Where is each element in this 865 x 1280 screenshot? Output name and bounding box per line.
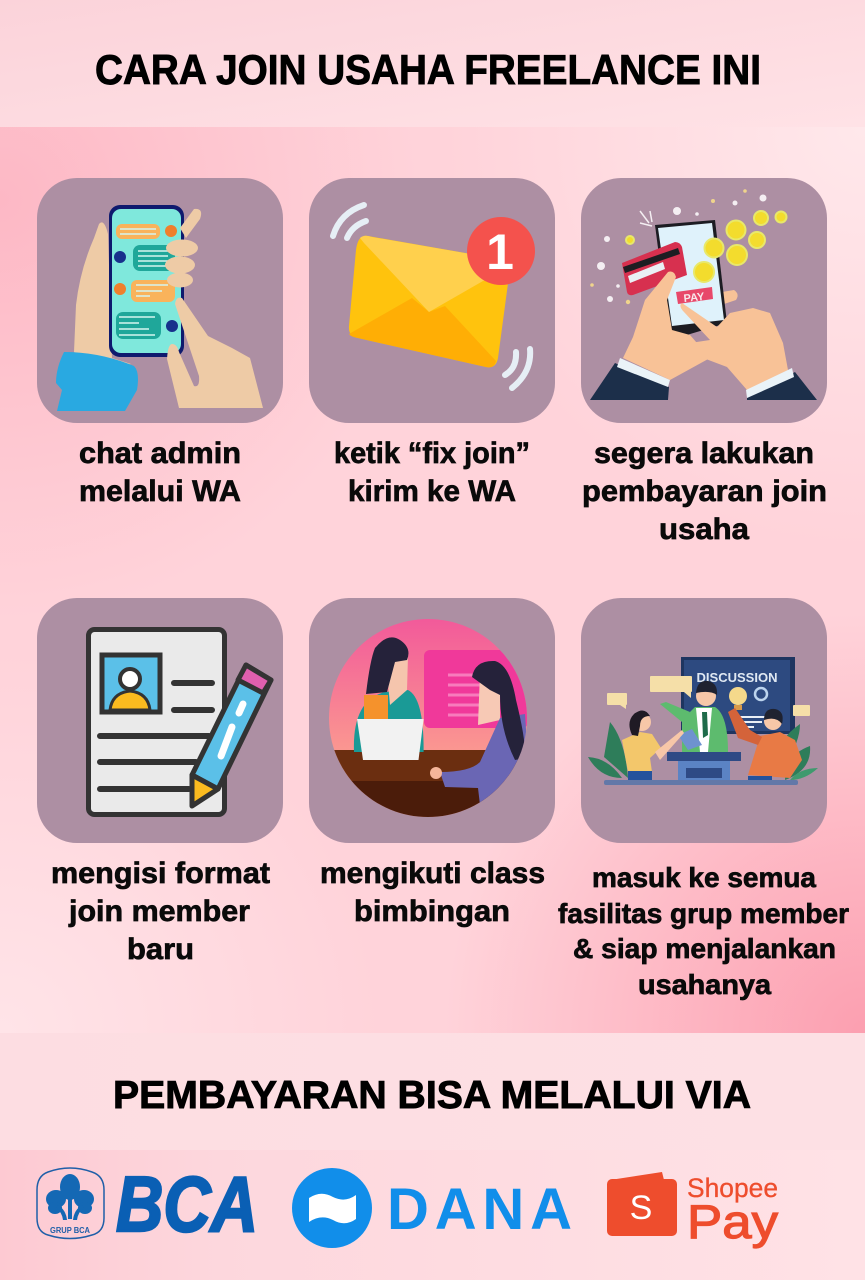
- heading: payment methods: PEMBAYARAN BISA MELALUI VIA: [113, 1074, 751, 1117]
- icon: envelope: [349, 236, 511, 367]
- label: step 5: bimbingan: [354, 895, 510, 928]
- text: DANA wordmark: DANA: [387, 1177, 572, 1242]
- icon: pay button: [676, 287, 713, 305]
- header band: [0, 0, 865, 127]
- icon: spark lines: [640, 211, 652, 226]
- logo: ShopeePay: [607, 1172, 779, 1248]
- text: Shopee Pay wordmark: Shopee: [687, 1173, 778, 1203]
- icon: floor: [604, 780, 798, 785]
- label: step 6: & siap menjalankan: [573, 933, 836, 964]
- label: step 3: pembayaran join: [582, 475, 827, 508]
- icon: left hand: [623, 272, 710, 380]
- icon: coins: [626, 211, 786, 282]
- label: step 6: usahanya: [638, 969, 772, 1000]
- icon: discussion board: DISCUSSION: [696, 671, 778, 685]
- logo: BCA: [37, 1160, 258, 1248]
- panel: step 4 form: [37, 598, 283, 843]
- label: step 3: usaha: [659, 513, 749, 546]
- label: step 2: kirim ke WA: [348, 475, 516, 508]
- icon: man right: [728, 708, 802, 780]
- icon: BCA emblem: GRUP BCA: [50, 1226, 90, 1235]
- icon: fingers: [165, 209, 201, 288]
- icon: sparkle dots: [590, 189, 766, 304]
- icon: discussion board: [681, 657, 795, 734]
- label: step 1: chat admin: [79, 437, 241, 470]
- icon: sleeves and cuffs: [590, 358, 817, 400]
- icon: payment phone: [655, 220, 727, 340]
- label: step 6: fasilitas grup member: [558, 898, 849, 929]
- panel: step 1 chat admin: [37, 178, 283, 423]
- icon: notification badge: 1: [486, 224, 514, 280]
- icon: left hand holding phone: [74, 222, 131, 372]
- icon: fingers behind phone: [722, 290, 738, 304]
- icon: pointing hand: [167, 298, 263, 408]
- label: step 2: ketik “fix join”: [334, 437, 530, 470]
- footer heading band: [0, 1033, 865, 1150]
- icon: blue sleeve: [56, 352, 138, 411]
- icon: Shopee wallet: S: [630, 1189, 652, 1227]
- icon: right hand: [680, 303, 788, 390]
- icon: speech bubbles: [607, 676, 810, 716]
- icon: DANA circle: [292, 1168, 372, 1248]
- payment logo band: [0, 1150, 865, 1280]
- icon: podium: [667, 752, 741, 780]
- label: step 6: masuk ke semua: [592, 862, 817, 893]
- label: step 4: mengisi format: [51, 857, 270, 890]
- panel: step 2 email notification: [309, 178, 555, 423]
- icon: chat phone: [109, 205, 184, 357]
- label: step 4: join member: [68, 895, 250, 928]
- text: Shopee Pay wordmark: Pay: [687, 1195, 779, 1248]
- icon: Shopee wallet: [607, 1172, 677, 1236]
- icon: presenter: [660, 681, 728, 752]
- text: Shopee Pay wordmark: [687, 1173, 779, 1248]
- label: step 5: mengikuti class: [320, 857, 545, 890]
- icon: document: [88, 630, 224, 814]
- title: CARA JOIN USAHA FREELANCE INI: [95, 46, 761, 93]
- icon: credit card: [622, 242, 687, 295]
- icon: plants: [588, 722, 818, 780]
- icon: notification badge: [467, 217, 535, 285]
- panel: step 5 class: [309, 598, 555, 843]
- icon: woman: [622, 710, 684, 780]
- icon: pay button: PAY: [683, 291, 706, 305]
- label: step 1: melalui WA: [79, 475, 241, 508]
- icon: vibration arcs: [333, 205, 530, 388]
- icon: pencil: [192, 665, 271, 806]
- icon: BCA emblem: [37, 1168, 104, 1238]
- text: BCA wordmark: BCA: [116, 1160, 258, 1248]
- panel: step 3 payment: [581, 178, 827, 423]
- logo: DANA: [292, 1168, 572, 1248]
- icon: class scene circle: [329, 619, 530, 821]
- label: step 4: baru: [127, 933, 194, 966]
- label: step 3: segera lakukan: [594, 437, 814, 470]
- panel: step 6 discussion: [581, 598, 827, 843]
